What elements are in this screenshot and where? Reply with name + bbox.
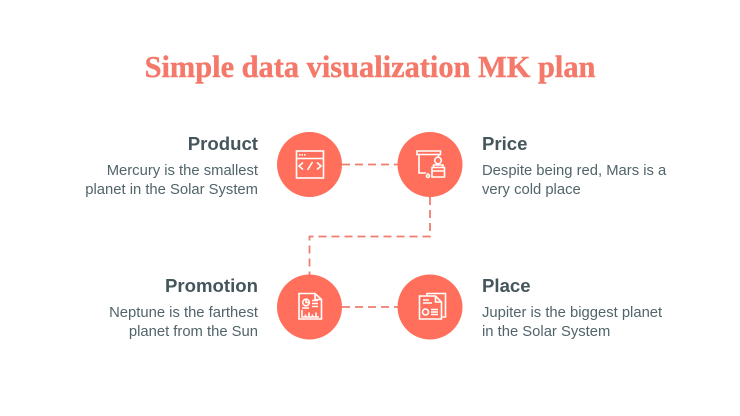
circle: place [398,274,462,340]
text: product description: Mercury is the smallest [107,163,258,179]
heading: place: Place [482,275,531,296]
text: place description: Jupiter is the biggest planet [482,305,662,321]
circle: product [277,132,342,197]
icon: presentation board with person [417,151,444,178]
title: Simple data visualization MK plan [145,50,595,84]
icon: overlapping documents [420,294,446,319]
text: promotion description: Neptune is the farthest [109,305,258,321]
heading: product: Product [188,133,258,154]
connector: product to price [342,164,398,166]
text: price description [482,163,666,198]
text: promotion description: planet from the Sun [129,324,258,340]
circle: promotion [277,274,342,340]
heading: price: Price [482,133,528,154]
icon: report document with charts [299,294,322,319]
text: price description: Despite being red, Mars is a [482,163,666,179]
circle: price [398,132,462,197]
text: place description: in the Solar System [482,324,610,340]
text: promotion description [109,305,258,340]
text: price description: very cold place [482,182,581,198]
text: product description: planet in the Solar System [85,182,258,198]
text: product description [85,163,258,198]
heading: promotion: Promotion [165,275,258,296]
text: place description [482,305,662,340]
connector: promotion to place [342,306,398,308]
connector: price to promotion [310,197,430,275]
icon: code window [296,151,324,178]
